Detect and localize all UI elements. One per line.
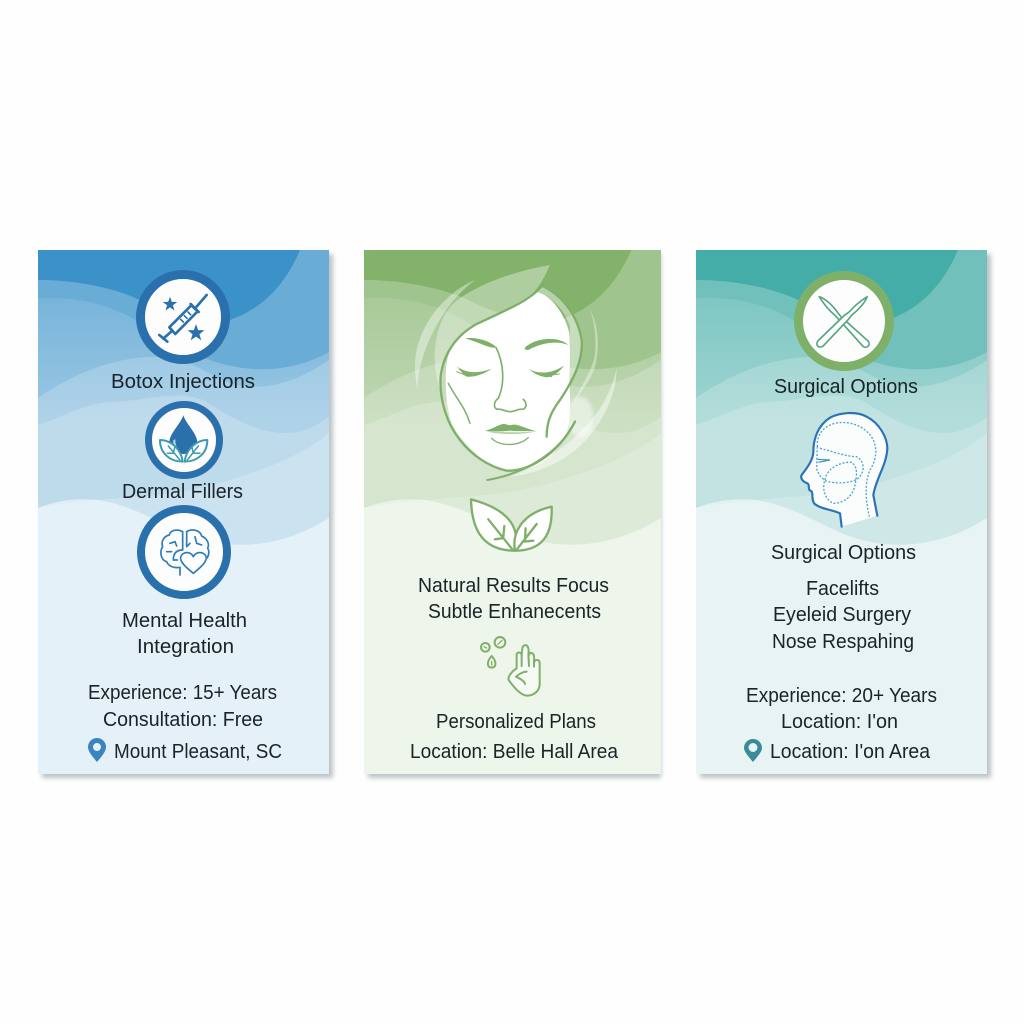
text: personalized plans and location: Location: Belle Hall Area: [410, 741, 619, 763]
brows, eyes and lips: [457, 338, 569, 434]
card shadow: [368, 254, 661, 778]
text: Mental Health Integration: Integration: [137, 636, 234, 658]
wave background: [696, 250, 987, 774]
icon: head profile with surgical guides: [801, 413, 887, 527]
icon: location pin: [88, 738, 106, 762]
card shadow: [42, 254, 333, 778]
heading: Botox Injections: Botox Injections: [111, 371, 255, 393]
text: natural results focus: Natural Results Focus: [418, 575, 609, 597]
text: location: Mount Pleasant, SC: [114, 741, 282, 763]
text: procedures list: Facelifts: [806, 578, 879, 600]
icon: two leaves: [471, 499, 552, 551]
text: natural results focus: [418, 575, 609, 623]
icon: location pin: [744, 739, 762, 762]
face lines: [441, 283, 582, 480]
hair swooshes: [415, 265, 617, 477]
text: experience and consultation: [88, 682, 277, 731]
icon: hand and seeds: [481, 637, 540, 696]
icon: syringe with stars: [140, 274, 226, 360]
icon: water drop and leaves: [148, 404, 220, 476]
text: experience and consultation: Experience: 15+ Years: [88, 682, 277, 704]
text: location area: Location: I'on Area: [770, 741, 931, 763]
wave background: [364, 250, 661, 774]
text: personalized plans and location: Personalized Plans: [436, 711, 596, 733]
card shadow: [700, 254, 991, 778]
icon: brain and heart: [141, 509, 227, 595]
text: procedures list: Eyeleid Surgery: [773, 604, 911, 626]
heading: Surgical Options: Surgical Options: [774, 376, 918, 398]
text: procedures list: [772, 578, 914, 653]
icon: crossed scalpels: [798, 276, 890, 366]
text: Mental Health Integration: [122, 610, 247, 658]
text: personalized plans and location: [410, 711, 619, 763]
text: procedures list: Nose Respahing: [772, 631, 914, 653]
text: experience and location: Experience: 20+ Years: [746, 685, 937, 707]
panel: natural results card: [364, 250, 661, 778]
text: Mental Health Integration: Mental Health: [122, 610, 247, 632]
heading: Dermal Fillers: Dermal Fillers: [122, 481, 243, 503]
panel: surgical card: [696, 250, 991, 778]
illustration: woman's face: [415, 265, 617, 480]
text: natural results focus: Subtle Enhanecents: [428, 601, 601, 623]
text: experience and location: [746, 685, 937, 733]
face skin: [446, 292, 570, 471]
wave background: [38, 250, 329, 774]
panel: injectables card: [38, 250, 333, 778]
heading: Surgical Options list title: Surgical Options: [771, 542, 916, 564]
text: experience and consultation: Consultation: Free: [103, 709, 263, 731]
text: experience and location: Location: I'on: [781, 711, 898, 733]
